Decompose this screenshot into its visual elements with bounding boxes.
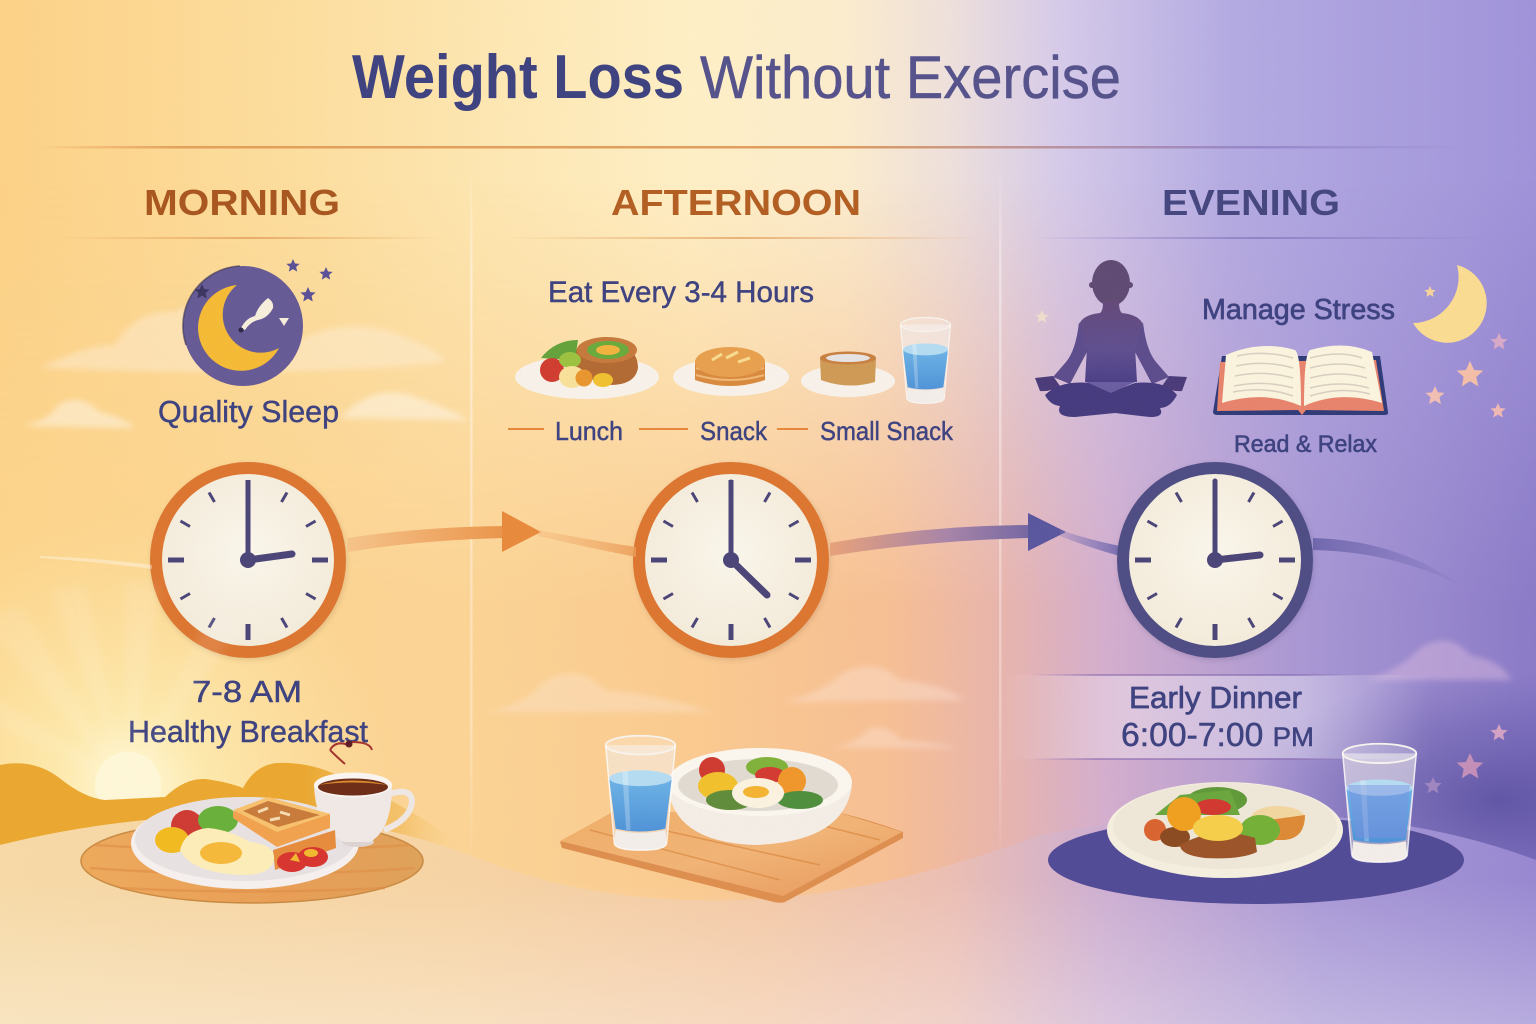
clock: evening <box>1118 464 1314 660</box>
icon: sleep moon <box>183 259 333 386</box>
icon: water glass <box>900 318 951 403</box>
icon: water glass <box>1342 744 1417 862</box>
label: read and relax: Read & Relax <box>1234 431 1377 458</box>
yellow fruit <box>155 827 189 853</box>
label: quality sleep: Quality Sleep <box>158 394 339 429</box>
icon: small snack plate <box>801 352 895 397</box>
arrow: evening onward <box>1313 538 1468 590</box>
placemat <box>81 819 423 903</box>
stars <box>1424 286 1508 793</box>
heading: evening: EVENING <box>1162 182 1340 223</box>
fried egg <box>180 828 274 875</box>
label: breakfast time: Healthy Breakfast <box>128 714 368 749</box>
placemat <box>1048 816 1464 904</box>
meal labels: Lunch <box>555 416 623 446</box>
sunrise landscape <box>0 580 1536 1024</box>
clock: afternoon <box>634 464 830 660</box>
panel: evening <box>1000 182 1508 904</box>
title <box>352 43 1121 112</box>
waffle stack <box>233 797 336 870</box>
icon: breakfast plate <box>81 740 423 903</box>
tomatoes <box>277 852 307 872</box>
arrows: timeline <box>40 511 1468 590</box>
icon: dinner plate <box>1048 782 1464 904</box>
label: eat every 3-4 hours: Eat Every 3-4 Hours <box>548 276 814 309</box>
bowl <box>668 785 852 845</box>
banner: early dinner <box>1000 674 1430 760</box>
meal labels: Small Snack <box>820 416 954 446</box>
meal labels: Snack <box>700 416 768 446</box>
title: Without Exercise <box>700 44 1121 111</box>
steam <box>330 742 372 764</box>
heading: morning: MORNING <box>144 182 340 223</box>
green fruit <box>198 806 238 834</box>
icon: meditating person <box>1035 260 1187 417</box>
icon: crescent moon <box>1413 265 1487 343</box>
banner: early dinner: 6:00-7:00 PM <box>1121 716 1314 753</box>
label: manage stress: Manage Stress <box>1202 294 1395 326</box>
arrow: morning to afternoon <box>347 511 636 557</box>
icon: salad bowl on board <box>560 748 903 903</box>
arrow: afternoon to evening <box>830 513 1120 556</box>
clock: morning <box>151 464 347 660</box>
plate <box>1107 782 1343 878</box>
icon: open book <box>1213 345 1388 415</box>
panel: afternoon <box>500 182 980 903</box>
banner: early dinner: Early Dinner <box>1129 680 1302 715</box>
wooden board <box>560 812 903 903</box>
clouds <box>22 308 1512 748</box>
meal labels <box>508 416 954 446</box>
icon: water glass <box>605 736 676 850</box>
plate <box>131 797 359 889</box>
icon: lunch plate <box>515 337 659 399</box>
label: breakfast time <box>128 674 368 749</box>
title: Weight Loss <box>352 43 684 112</box>
label: breakfast time: 7-8 AM <box>192 674 302 709</box>
apple <box>171 810 203 842</box>
heading: afternoon: AFTERNOON <box>611 182 861 223</box>
food <box>1187 787 1247 813</box>
coffee cup <box>314 772 412 847</box>
icon: snack plate <box>673 347 789 396</box>
